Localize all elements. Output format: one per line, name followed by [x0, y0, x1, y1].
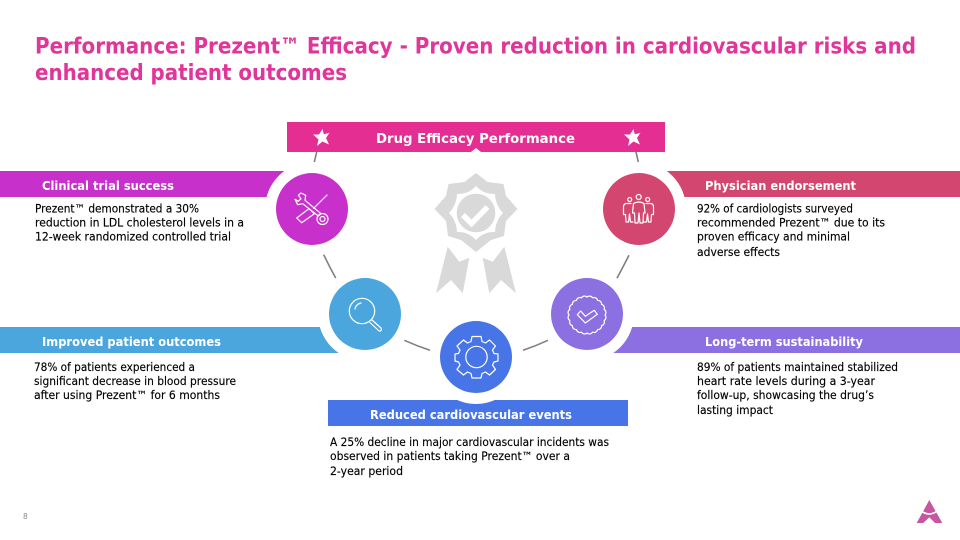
panel: improved patient outcomes: after using Prezent™ for 6 months: [34, 389, 220, 402]
panel: physician endorsement: proven efficacy and minimal: [697, 230, 850, 244]
panel: clinical trial success: Clinical trial success: [42, 178, 174, 193]
panel: improved patient outcomes: Improved patient outcomes: [42, 334, 221, 349]
icon: wrench and screwdriver: [295, 193, 328, 224]
icon: seal with check: [568, 296, 606, 334]
icon: right star: [624, 129, 640, 146]
node: sustainability (badge check icon): [551, 278, 623, 350]
node: cardiovascular events (gear icon): [440, 321, 512, 393]
node: clinical trial (tools icon): [276, 173, 348, 245]
icon: company logo: [917, 500, 942, 523]
node: physician (people icon): [603, 173, 675, 245]
panel: reduced cardiovascular events: 2-year period: [330, 465, 403, 478]
panel: reduced cardiovascular events: [328, 310, 628, 478]
arc connectors: [314, 152, 638, 350]
node: improved outcomes (magnifier icon): [329, 278, 401, 350]
panel: physician endorsement: adverse effects: [697, 246, 780, 259]
panel: clinical trial success: reduction in LDL cholesterol levels in a: [35, 216, 244, 230]
panel: clinical trial success: 12-week randomized controlled trial: [35, 230, 231, 244]
panel: clinical trial success: [0, 162, 359, 256]
panel: long-term sustainability: 89% of patients maintained stabilized: [697, 361, 898, 374]
panel: physician endorsement: Physician endorsement: [705, 178, 856, 193]
panel: improved patient outcomes: significant decrease in blood pressure: [34, 375, 236, 388]
panel: improved patient outcomes: [0, 267, 412, 402]
banner: drug efficacy performance: Drug Efficacy Performance: [376, 131, 575, 147]
panel: physician endorsement: recommended Prezent™ due to its: [697, 216, 885, 230]
panel: reduced cardiovascular events: observed in patients taking Prezent™ over a: [330, 450, 570, 463]
title: [35, 34, 916, 86]
title: enhanced patient outcomes: [35, 61, 347, 86]
icon: magnifying glass: [349, 298, 381, 331]
icon: gear: [455, 336, 498, 378]
page number: 8: [23, 512, 28, 521]
banner: drug efficacy performance: [287, 122, 665, 152]
panel: reduced cardiovascular events: Reduced cardiovascular events: [370, 407, 572, 422]
panel: reduced cardiovascular events: A 25% decline in major cardiovascular incidents was: [330, 436, 609, 449]
icon: award medal: [434, 173, 518, 293]
panel: physician endorsement: [592, 162, 960, 259]
panel: long-term sustainability: Long-term sustainability: [705, 334, 863, 349]
icon: left star: [313, 129, 330, 146]
panel: clinical trial success: Prezent™ demonstrated a 30%: [35, 202, 199, 216]
panel: long-term sustainability: [540, 267, 960, 417]
panel: long-term sustainability: follow-up, showcasing the drug’s: [697, 389, 874, 402]
panel: improved patient outcomes: 78% of patients experienced a: [34, 361, 195, 374]
icon: group of people: [624, 194, 654, 223]
panel: physician endorsement: 92% of cardiologists surveyed: [697, 202, 853, 216]
panel: long-term sustainability: lasting impact: [697, 404, 774, 417]
panel: long-term sustainability: heart rate levels during a 3-year: [697, 375, 875, 388]
